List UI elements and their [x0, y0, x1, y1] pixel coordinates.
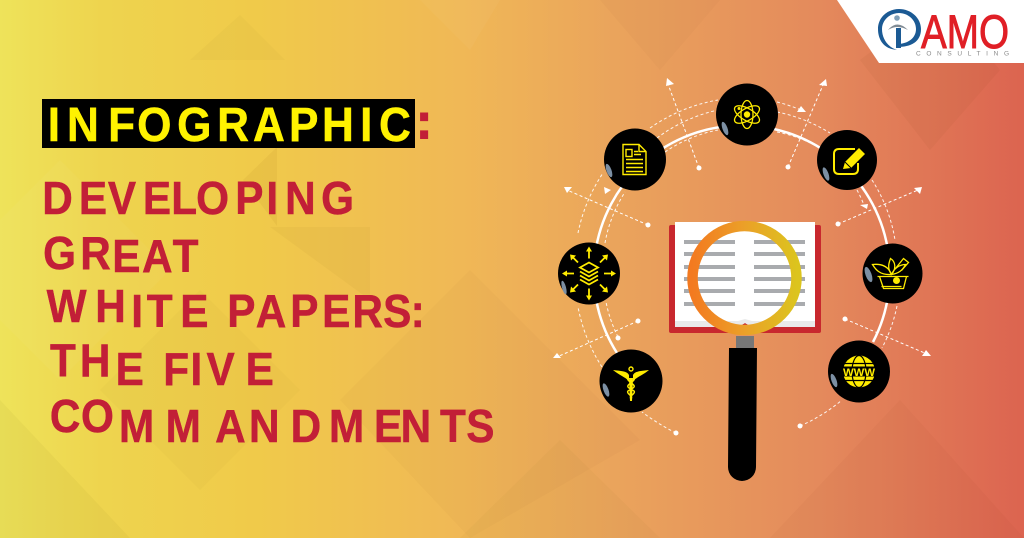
arrow heads: [553, 78, 931, 358]
icon: layers with arrows: [558, 242, 620, 304]
dashed orbit arcs: [578, 100, 897, 433]
magnifying glass: [692, 226, 796, 481]
solid orbit ring: [594, 125, 890, 353]
dashed arrows: [557, 84, 927, 357]
magnifier neck: [736, 336, 754, 349]
icon: www globe: [828, 340, 890, 402]
icon: herbal mortar: [862, 244, 922, 304]
logo panel: [837, 0, 1024, 63]
title line 3: WHITE PAPERS:: [47, 281, 425, 337]
heading: infographic: INFOGRAPHIC: [48, 97, 411, 151]
title: developing great white papers, the five commandments: [42, 173, 494, 452]
title line 4: THE FIVE: [50, 336, 274, 395]
open book: [669, 222, 821, 333]
icon: atom: [716, 84, 778, 146]
icon: caduceus: [600, 350, 662, 412]
book text lines: [684, 240, 805, 306]
icon: www globe: WWW: [843, 367, 876, 379]
magnifier handle: [728, 348, 757, 481]
arrow dots: [616, 164, 848, 436]
logo: figure: [888, 15, 908, 48]
title line 5: COMMANDMENTS: [50, 391, 494, 452]
heading label box: [42, 99, 415, 148]
logo: consulting: CONSULTING: [916, 50, 1009, 58]
icon: document: [604, 128, 666, 190]
heading colon: :: [417, 94, 431, 148]
logo: blue swoosh: [878, 9, 921, 50]
title line 1: DEVELOPING: [42, 173, 354, 224]
title line 2: GREAT: [43, 228, 198, 282]
icon: pencil note: [817, 130, 877, 190]
